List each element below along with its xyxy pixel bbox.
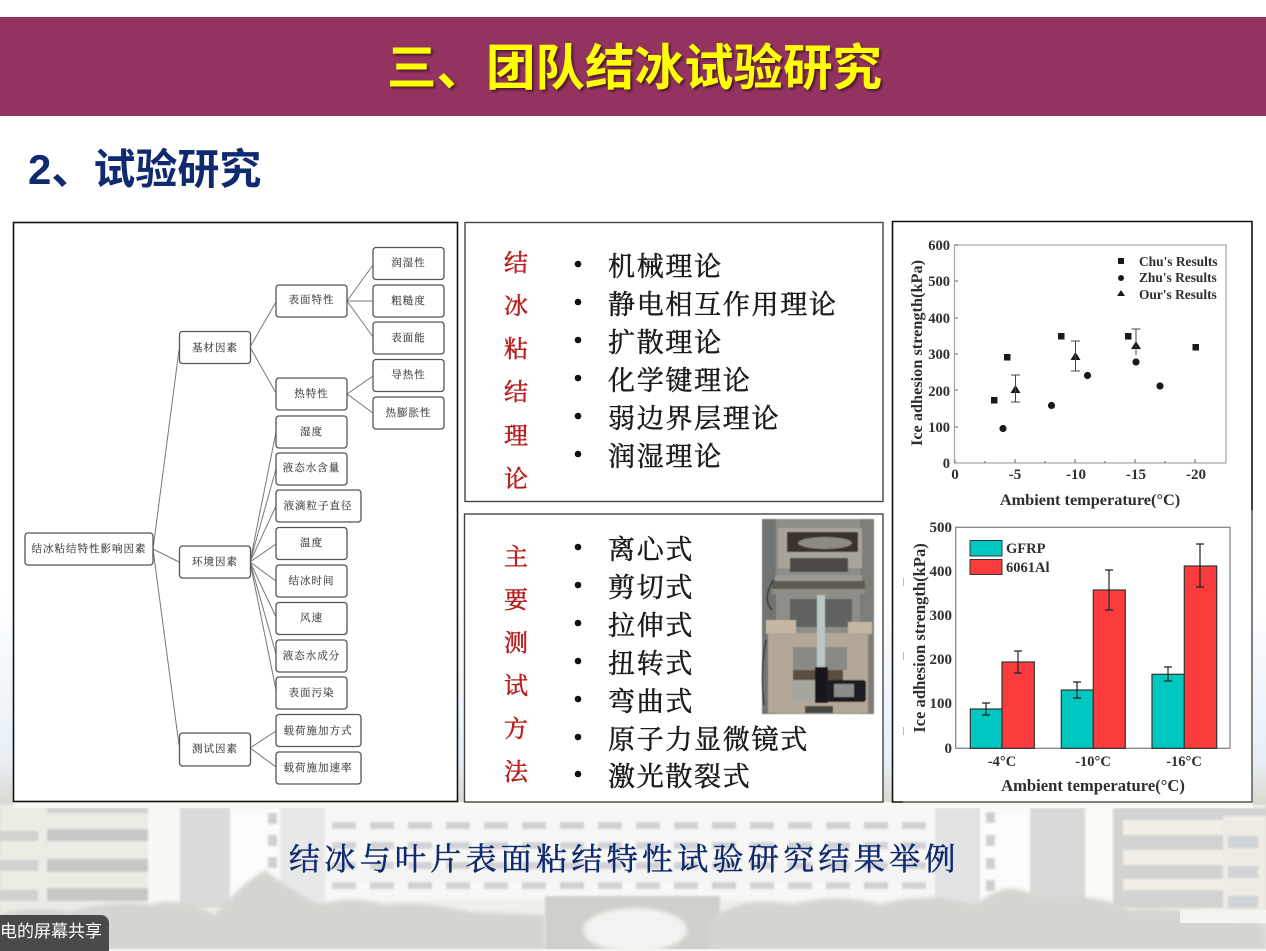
vertical red heading: theories: 理 (504, 424, 528, 450)
methods list: 弯曲式 (608, 687, 694, 717)
level one boxes (180, 332, 250, 766)
scatter points: Chu (991, 333, 1199, 404)
level two boxes: 液态水成分 (283, 649, 340, 662)
theories list: 化学键理论 (608, 366, 752, 396)
scatter legend (1117, 254, 1218, 302)
bar chart axes: -10°C (1075, 754, 1111, 770)
methods list: 剪切式 (608, 573, 694, 603)
level three boxes: 表面能 (391, 331, 426, 344)
scatter legend: Chu's Results (1139, 254, 1218, 269)
level two boxes: 载荷施加速率 (284, 761, 352, 774)
level one boxes: 基材因素 (192, 341, 238, 354)
methods list: 离心式 (608, 535, 694, 565)
bar chart axes: -16°C (1166, 754, 1202, 770)
bar chart axes (910, 520, 1230, 795)
6061Al bars (1002, 566, 1217, 748)
scatter axes: 500 (928, 274, 950, 290)
vertical red heading: methods: 主 (504, 544, 528, 571)
panel: scatter chart (892, 222, 1252, 514)
header band (0, 17, 1266, 116)
level two boxes (276, 285, 361, 784)
theories list: 扩散理论 (608, 328, 723, 358)
vertical red heading: theories (504, 250, 528, 493)
scatter axes: 200 (928, 384, 950, 400)
methods list: 激光散裂式 (608, 762, 752, 792)
scatter axes: -10 (1066, 467, 1086, 483)
bar chart axes: 400 (930, 564, 952, 580)
GFRP bars (970, 674, 1184, 748)
vertical red heading: methods: 法 (504, 759, 529, 786)
panel: bar chart (892, 510, 1253, 803)
level three boxes (373, 248, 444, 429)
level two boxes: 液滴粒子直径 (284, 499, 352, 512)
theories list: 机械理论 (608, 252, 723, 282)
scatter axes: 600 (928, 238, 950, 254)
bar chart legend (970, 540, 1050, 576)
vertical red heading: theories: 结 (504, 379, 528, 406)
scatter axes: 0 (951, 467, 959, 483)
theories list: 润湿理论 (608, 442, 723, 472)
level two boxes: 温度 (300, 536, 323, 549)
scatter axes (907, 238, 1226, 509)
bar chart axes: -4°C (988, 754, 1016, 770)
bar chart axes: Ice adhesion strength(kPa) (910, 543, 929, 733)
vertical red heading: methods: 试 (504, 673, 528, 700)
panel: test methods (464, 514, 883, 802)
level three boxes: 粗糙度 (391, 294, 426, 307)
vertical red heading: theories: 冰 (504, 293, 528, 320)
bar chart legend: 6061Al (1006, 560, 1050, 576)
vertical red heading: methods: 要 (504, 587, 528, 614)
level three boxes: 热膨胀性 (386, 406, 432, 419)
scatter axes: -5 (1009, 467, 1021, 483)
screen share tag (0, 915, 109, 951)
error bars (982, 544, 1204, 715)
level two boxes: 湿度 (300, 425, 323, 438)
scatter axes: Ambient temperature(°C) (1000, 490, 1180, 509)
background: faded campus building (0, 802, 1266, 951)
scatter legend: Zhu's Results (1139, 270, 1217, 285)
bar chart axes: 500 (930, 520, 952, 536)
title: 三、团队结冰试验研究 (387, 41, 882, 96)
level two boxes: 液态水含量 (283, 461, 340, 474)
level two boxes: 风速 (300, 611, 323, 624)
level two boxes: 热特性 (294, 387, 329, 400)
level two boxes: 表面污染 (288, 686, 334, 699)
scatter axes: -15 (1126, 467, 1146, 483)
tree connector lines (153, 265, 373, 767)
root box (25, 533, 153, 565)
vertical red heading: methods: 方 (504, 716, 528, 743)
caption: 结冰与叶片表面粘结特性试验研究结果举例 (289, 842, 960, 877)
bar chart axes: 100 (930, 696, 952, 712)
methods list (575, 535, 809, 792)
bar chart axes: 300 (930, 608, 952, 624)
level two boxes: 结冰时间 (288, 574, 334, 587)
photo: test apparatus (762, 519, 874, 714)
scatter axes: Ice adhesion strength(kPa) (907, 260, 926, 446)
screen share tag: 电的屏幕共享 (0, 922, 102, 941)
bar chart axes: 200 (930, 652, 952, 668)
vertical red heading: methods (504, 544, 529, 786)
vertical red heading: theories: 论 (504, 466, 528, 493)
scatter axes: 300 (928, 347, 950, 363)
bar chart axes: Ambient temperature(°C) (1001, 776, 1185, 795)
level one boxes: 环境因素 (192, 555, 238, 568)
methods list: 拉伸式 (608, 611, 694, 641)
section heading: 2、试验研究 (28, 146, 261, 193)
bar chart legend: GFRP (1006, 541, 1046, 557)
level three boxes: 导热性 (391, 368, 426, 381)
theories list: 弱边界层理论 (608, 404, 780, 434)
scatter legend: Our's Results (1139, 287, 1217, 302)
level two boxes: 载荷施加方式 (284, 724, 352, 737)
scatter axes: 100 (928, 420, 950, 436)
theories list (575, 252, 838, 472)
bar chart axes: 0 (944, 741, 952, 757)
scatter axes: 400 (928, 311, 950, 327)
scatter points: Zhu (999, 358, 1164, 432)
methods list: 扭转式 (608, 649, 694, 679)
scatter axes: 0 (943, 456, 950, 472)
theories list: 静电相互作用理论 (608, 290, 838, 320)
panel: influencing factors tree (14, 222, 458, 802)
vertical red heading: methods: 测 (504, 630, 528, 657)
panel: adhesion theories (465, 222, 883, 502)
level two boxes: 表面特性 (288, 293, 334, 306)
level one boxes: 测试因素 (192, 742, 238, 755)
vertical red heading: theories: 结 (504, 250, 528, 277)
level three boxes: 润湿性 (391, 256, 426, 269)
vertical red heading: theories: 粘 (504, 336, 528, 363)
scatter points: Ours with error bars (1010, 329, 1141, 402)
scatter axes: -20 (1186, 467, 1206, 483)
methods list: 原子力显微镜式 (608, 725, 809, 755)
root box: 结冰粘结特性影响因素 (32, 542, 146, 555)
